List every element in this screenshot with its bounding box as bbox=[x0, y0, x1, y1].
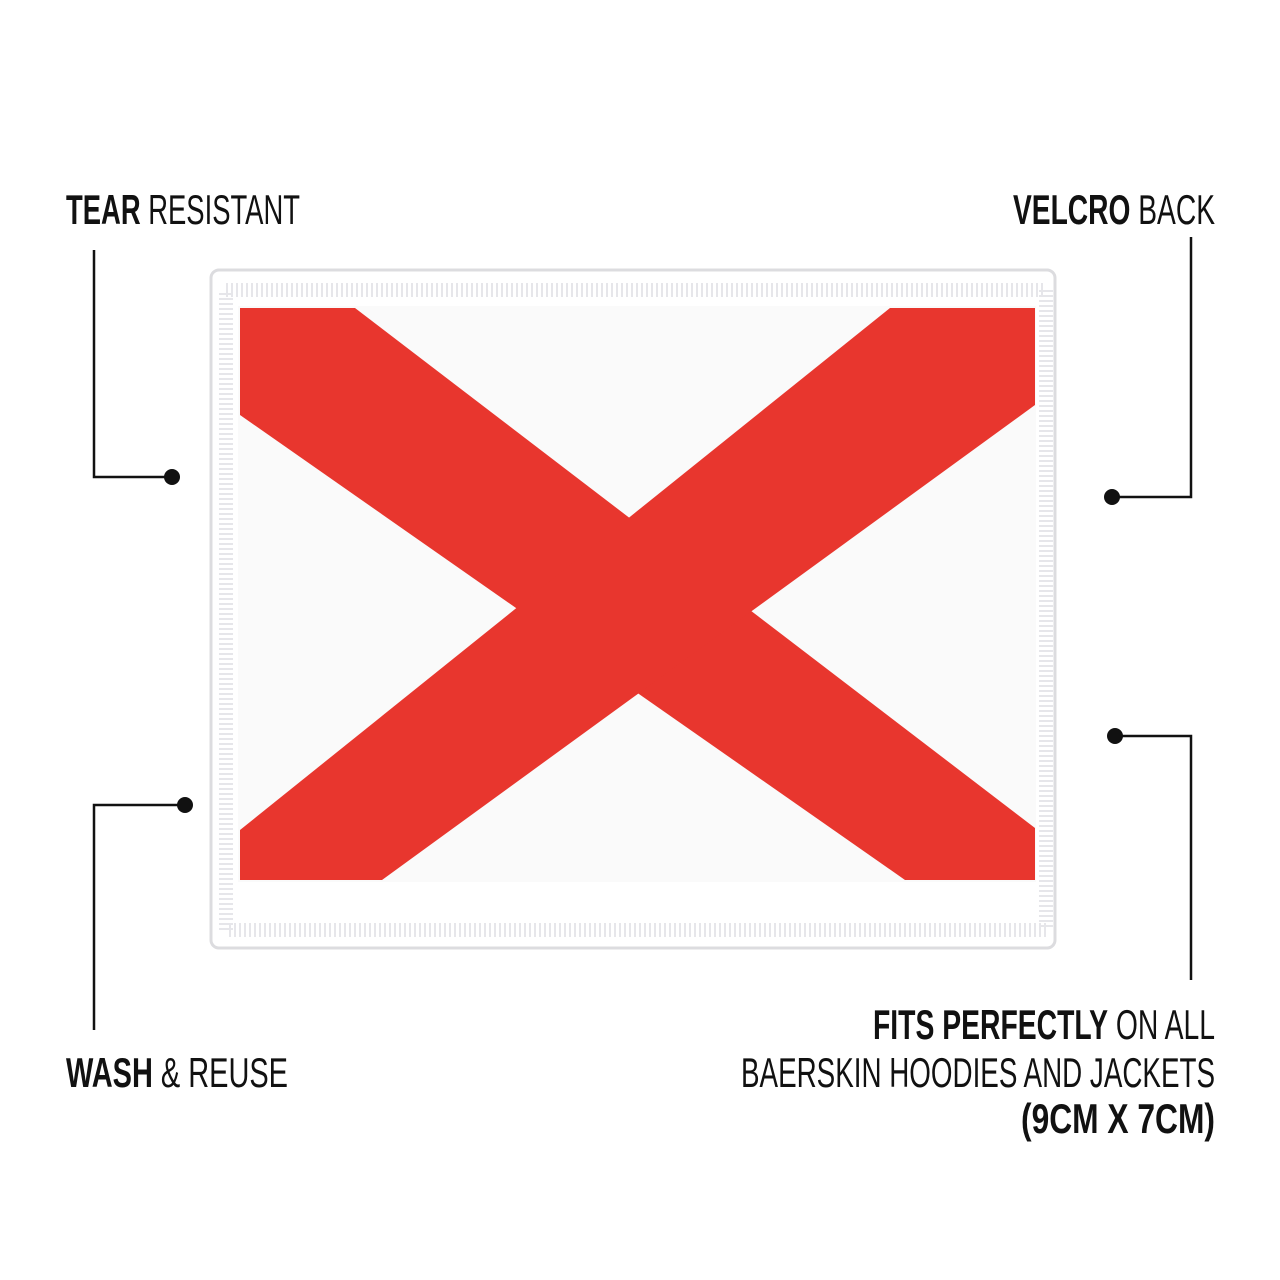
patch bbox=[211, 270, 1055, 948]
red cross bar: top-left to bottom-right bbox=[240, 308, 1035, 880]
callout: velcro back: VELCRO BACK bbox=[1013, 186, 1215, 233]
callout: tear resistant bbox=[66, 186, 300, 485]
callout: tear resistant: TEAR RESISTANT bbox=[66, 186, 300, 233]
callout: velcro back bbox=[1013, 186, 1215, 505]
red cross bar: top-right to bottom-left bbox=[240, 308, 1035, 880]
callout: fits perfectly bbox=[741, 728, 1215, 1142]
callout: fits perfectly: (9CM X 7CM) bbox=[1021, 1095, 1215, 1142]
callout: wash & reuse bbox=[66, 797, 288, 1096]
callout: fits perfectly: FITS PERFECTLY ON ALL bbox=[873, 1001, 1215, 1048]
callout: wash & reuse: WASH & REUSE bbox=[66, 1049, 288, 1096]
